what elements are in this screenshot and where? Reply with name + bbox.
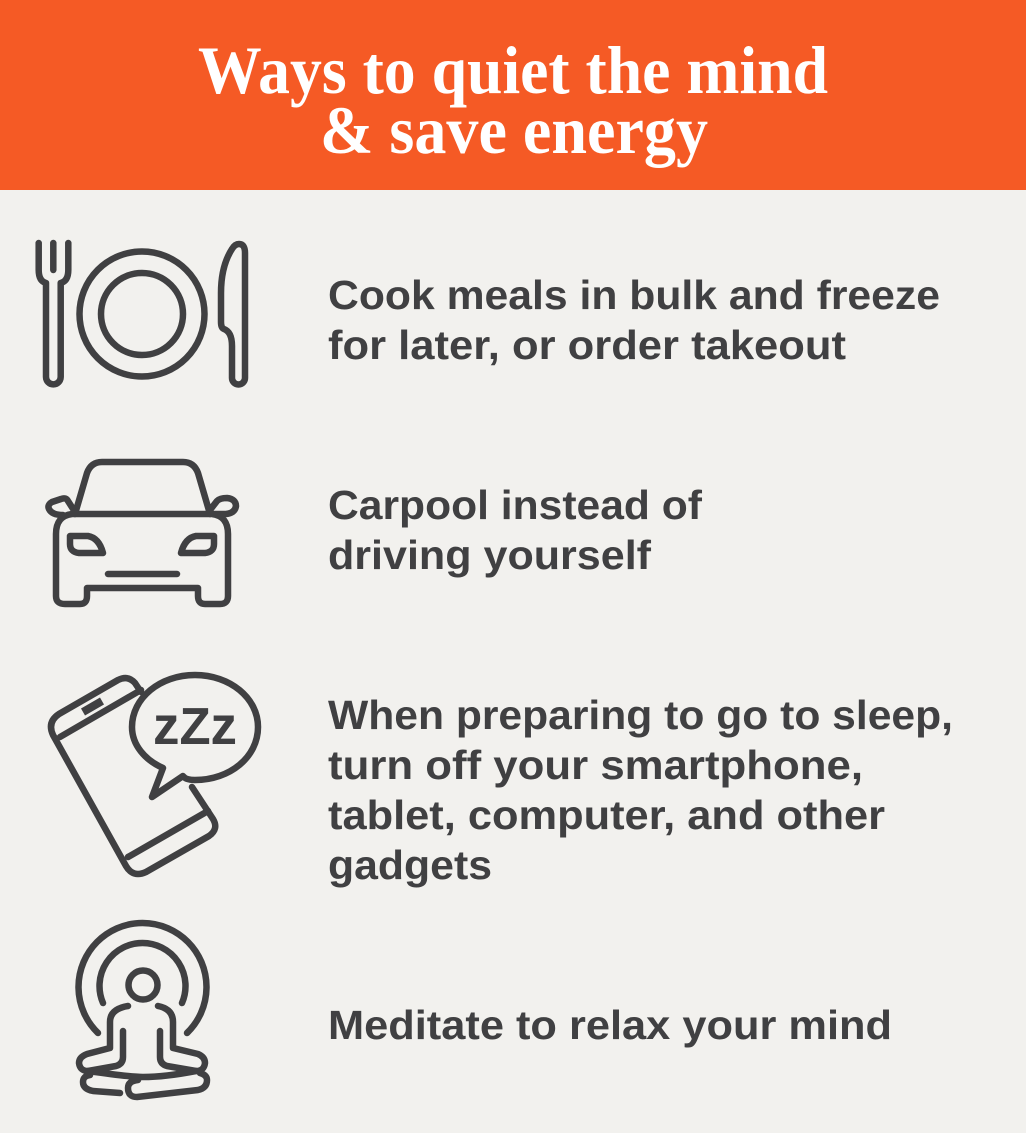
text: sleep gadgets: When preparing to go to sleep, [328,692,953,738]
text: sleep gadgets [328,692,953,888]
text: sleep gadgets: tablet, computer, and other [328,792,885,838]
title [198,32,828,168]
header banner [0,0,1026,190]
text: cook meals: for later, or order takeout [328,322,846,368]
text: carpool [328,482,702,578]
text: cook meals: Cook meals in bulk and freeze [328,272,940,318]
text: carpool: Carpool instead of [328,482,702,528]
text: meditate: Meditate to relax your mind [328,1002,892,1048]
icon: meditating person [78,923,207,1097]
icon: smartphone with sleep bubble [51,675,258,874]
text: sleep gadgets: gadgets [328,842,492,888]
icon: smartphone with sleep bubble: zZz [153,696,237,756]
title: Ways to quiet the mind [198,32,828,108]
text: cook meals [328,272,940,368]
icon: car [48,462,236,604]
icon: plate with fork and knife [39,243,245,384]
title: & save energy [320,92,708,168]
text: carpool: driving yourself [328,532,651,578]
text: sleep gadgets: turn off your smartphone, [328,742,863,788]
